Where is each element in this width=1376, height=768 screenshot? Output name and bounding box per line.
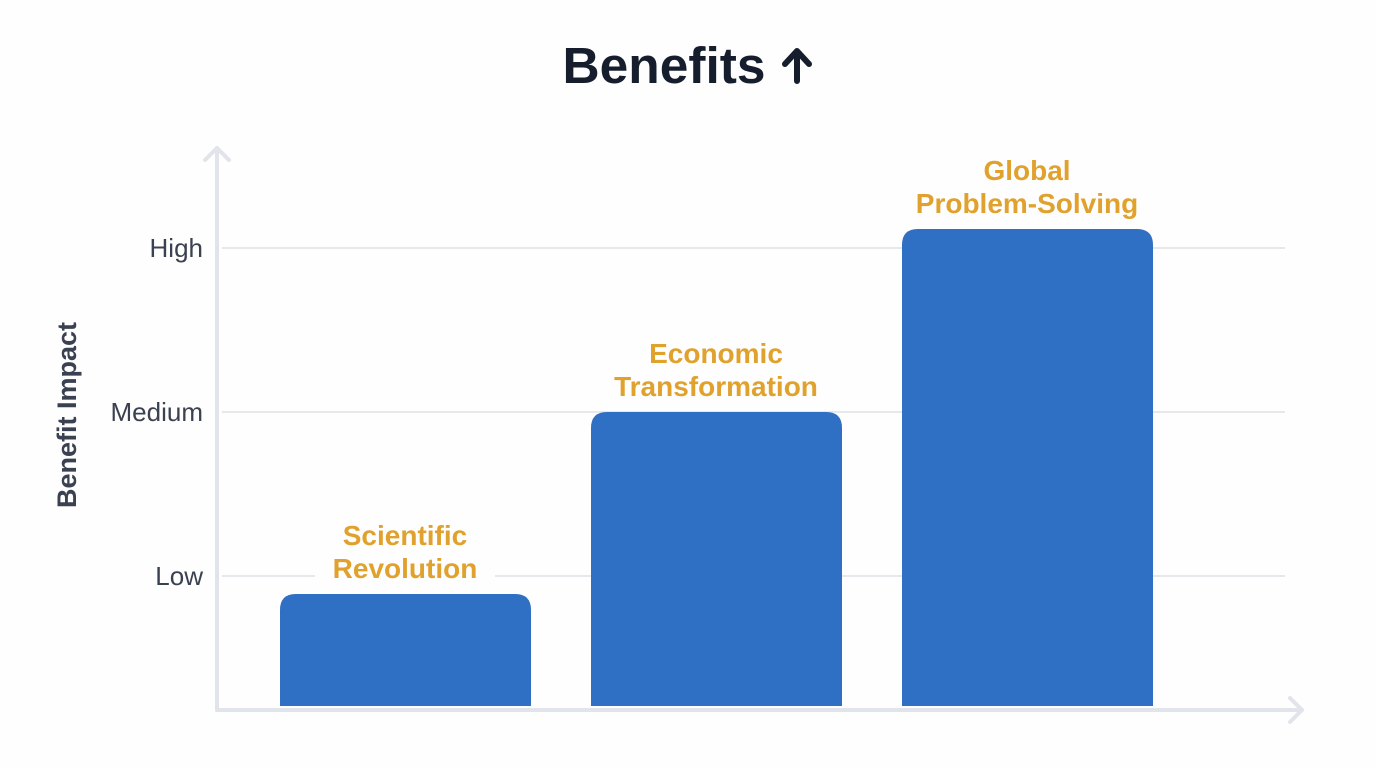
- icon: up arrow: [785, 51, 809, 81]
- bar: Economic Transformation: [591, 412, 842, 706]
- y-axis tick labels: Medium: [111, 397, 203, 427]
- bar labels: Problem-Solving: [916, 188, 1138, 219]
- bar labels: Revolution: [333, 553, 477, 584]
- bar: Global Problem-Solving: [902, 229, 1153, 706]
- y-axis tick labels: Low: [155, 561, 203, 591]
- bar labels: Transformation: [614, 371, 818, 402]
- bar: Scientific Revolution: [280, 594, 531, 706]
- bar labels: [315, 155, 1138, 586]
- bar labels: Global: [983, 155, 1071, 186]
- title: Benefits: [562, 37, 766, 94]
- bar labels: Scientific: [343, 520, 467, 551]
- y-axis tick labels: High: [150, 233, 203, 263]
- y-axis title: Benefit Impact: [52, 322, 82, 508]
- y-axis tick labels: [111, 233, 203, 591]
- bar labels: Economic: [649, 338, 783, 369]
- axes: [205, 148, 1302, 722]
